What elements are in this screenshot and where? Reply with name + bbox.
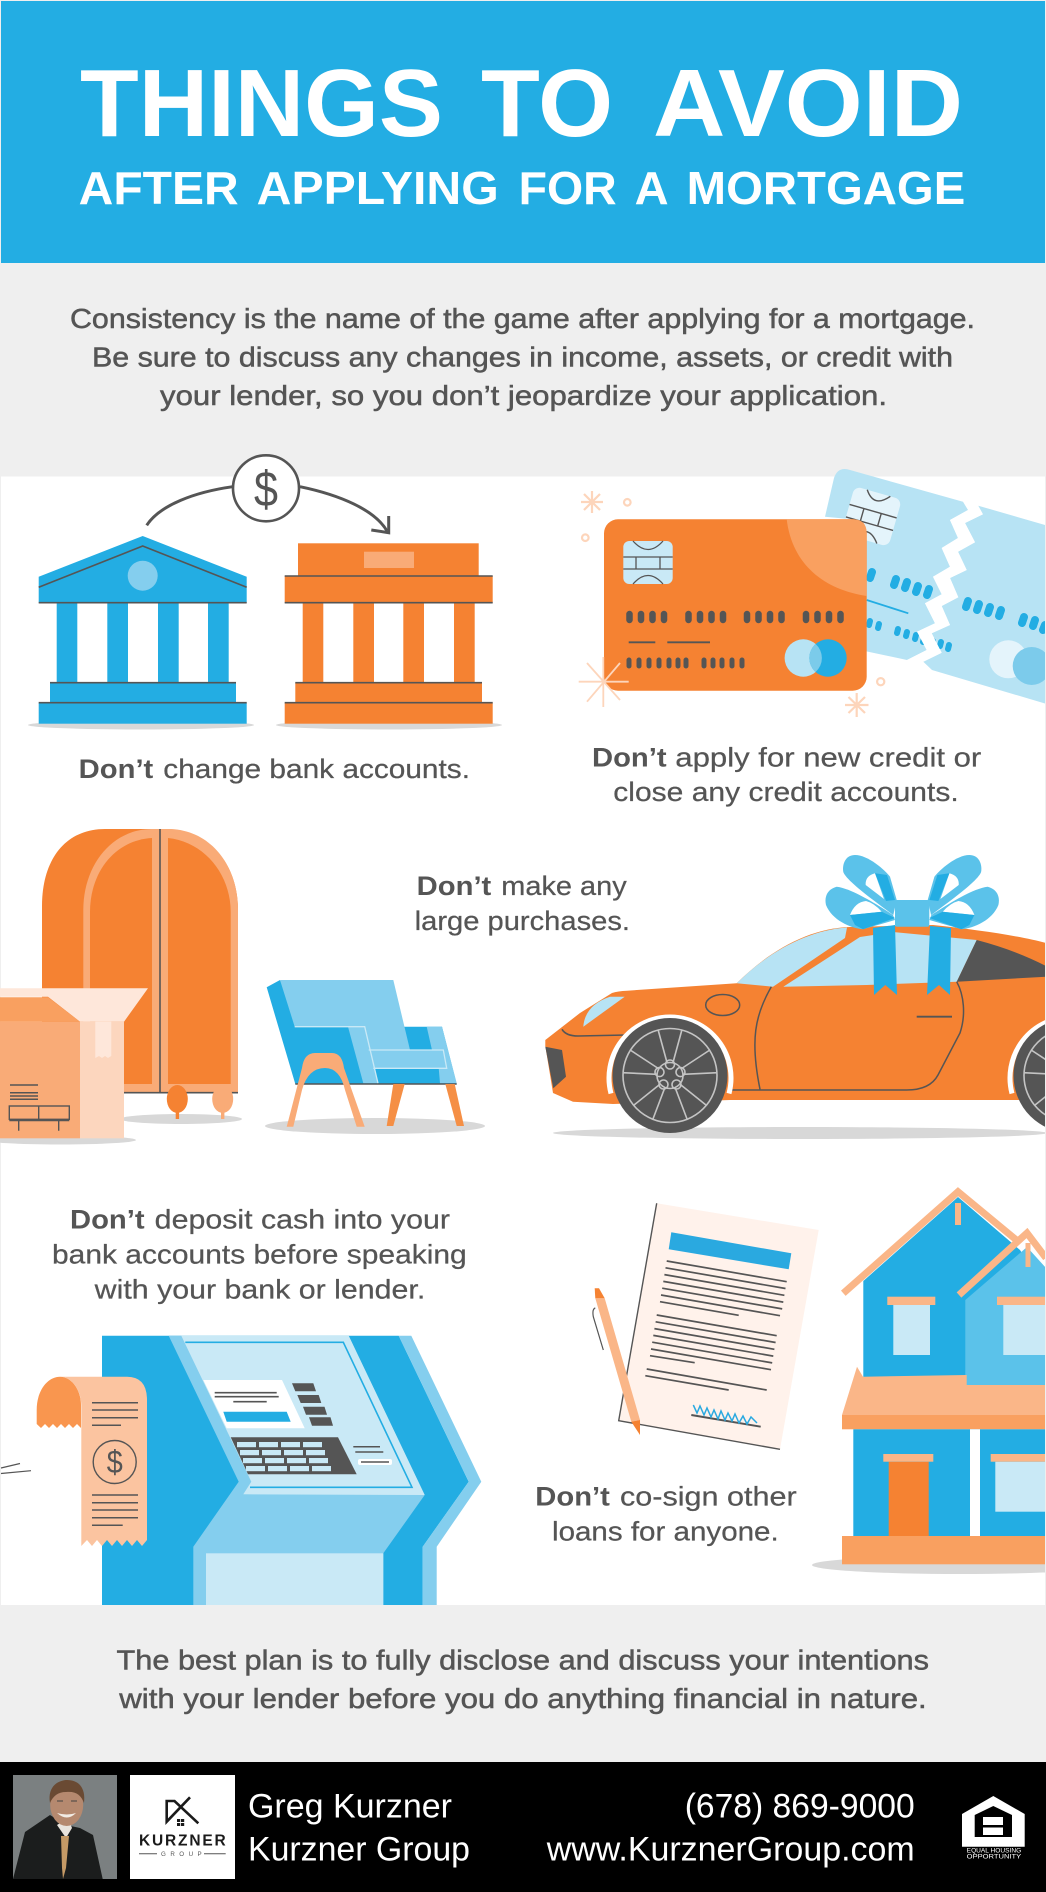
text: large purchases: make any xyxy=(501,871,627,901)
subtitle: AFTER xyxy=(79,162,239,214)
icon: wardrobe xyxy=(42,829,242,1124)
icon: torn credit card xyxy=(825,469,1046,704)
icon: equal housing opportunity xyxy=(962,1796,1025,1860)
company logo: KURZNER xyxy=(139,1833,226,1850)
subtitle: MORTGAGE xyxy=(687,162,965,214)
text: change bank accounts: change bank accounts. xyxy=(163,754,470,784)
title xyxy=(80,50,963,157)
arrow: money transfer xyxy=(147,455,389,533)
text: deposit cash xyxy=(52,1204,467,1304)
icon: gift bow xyxy=(825,855,999,995)
text: co-sign loans: Don’t xyxy=(535,1482,610,1512)
intro text: Be sure to discuss any changes in income, assets, or credit with xyxy=(92,342,953,372)
intro text: your lender, so you don’t jeopardize your application. xyxy=(160,380,887,411)
icon: orange credit card xyxy=(604,519,867,691)
icon: signed document xyxy=(619,1203,819,1449)
title: AVOID xyxy=(653,50,963,157)
icon: blue bank xyxy=(28,536,254,730)
section: credit cards xyxy=(579,469,1046,807)
footer bar xyxy=(0,1762,1046,1892)
agent name: Greg Kurzner xyxy=(248,1787,452,1825)
text: new credit: apply for new credit or xyxy=(675,743,981,773)
header banner xyxy=(1,1,1045,263)
text: large purchases: Don’t xyxy=(417,871,491,901)
intro text xyxy=(70,303,975,411)
title: TO xyxy=(481,50,613,157)
text: large purchases xyxy=(415,871,630,936)
title: THINGS xyxy=(80,50,443,157)
company logo xyxy=(130,1775,235,1879)
subtitle: APPLYING xyxy=(257,162,499,214)
text: large purchases: large purchases. xyxy=(415,906,630,936)
icon: receipt xyxy=(1,1377,147,1546)
icon: orange bank xyxy=(276,543,502,730)
closing text: with your lender before you do anything financial in nature. xyxy=(118,1683,927,1714)
subtitle xyxy=(79,162,965,214)
intro text: Consistency is the name of the game after applying for a mortgage. xyxy=(70,303,975,334)
text: new credit xyxy=(592,743,981,807)
text: co-sign loans: co-sign other xyxy=(620,1482,797,1512)
section: bank accounts xyxy=(28,455,502,784)
text: new credit: Don’t xyxy=(592,743,667,773)
contact details: www.KurznerGroup.com xyxy=(546,1831,915,1869)
agent name: Kurzner Group xyxy=(248,1831,470,1869)
text: co-sign loans xyxy=(535,1482,797,1547)
section: cash deposits xyxy=(1,1204,481,1605)
icon: sports car with bow xyxy=(545,855,1046,1140)
text: deposit cash: Don’t xyxy=(70,1204,145,1234)
closing text: The best plan is to fully disclose and discuss your intentions xyxy=(116,1644,929,1675)
subtitle: A xyxy=(635,162,669,214)
icon: armchair xyxy=(265,980,485,1134)
icon: pen xyxy=(593,1288,640,1435)
section: co-sign xyxy=(535,1192,1046,1574)
icon: sparkles xyxy=(579,491,884,717)
closing text xyxy=(116,1644,929,1714)
icon: receipt: $ xyxy=(107,1444,123,1480)
icon: house xyxy=(812,1192,1046,1574)
subtitle: FOR xyxy=(519,162,617,214)
contact details: (678) 869-9000 xyxy=(685,1787,915,1825)
icon: ATM xyxy=(102,1336,481,1605)
company logo: GROUP xyxy=(161,1851,202,1858)
text: deposit cash: deposit cash into your xyxy=(155,1204,450,1234)
text: deposit cash: with your bank or lender. xyxy=(94,1274,425,1304)
arrow: money transfer: $ xyxy=(254,461,278,517)
agent photo xyxy=(13,1775,117,1879)
text: deposit cash: bank accounts before speaking xyxy=(52,1239,467,1269)
text: new credit: close any credit accounts. xyxy=(613,777,959,807)
section: large purchases xyxy=(0,829,1046,1144)
text: change bank accounts: Don’t xyxy=(79,754,153,784)
icon: equal housing opportunity: OPPORTUNITY xyxy=(967,1854,1022,1860)
agent name xyxy=(248,1787,470,1869)
contact details xyxy=(546,1787,915,1869)
icon: equal housing opportunity: EQUAL HOUSING xyxy=(967,1848,1021,1854)
white content panel xyxy=(1,476,1045,1605)
icon: moving box xyxy=(0,988,148,1144)
text: co-sign loans: loans for anyone. xyxy=(552,1517,779,1547)
